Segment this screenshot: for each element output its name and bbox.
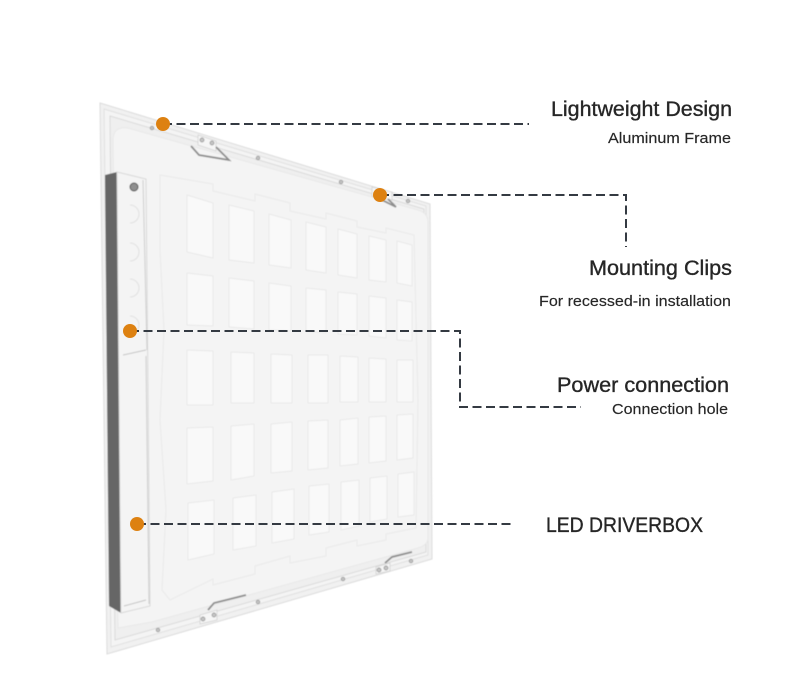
driver box — [105, 172, 150, 613]
callout: Mounting Clips — [373, 188, 732, 310]
callout: Lightweight Design — [156, 98, 732, 147]
embossed windows grid — [187, 195, 414, 560]
LED panel illustration — [100, 103, 432, 654]
callout: LED DRIVERBOX: LED DRIVERBOX — [546, 514, 703, 537]
embossed outline — [160, 175, 418, 600]
panel frame — [100, 103, 432, 654]
callout: Lightweight Design: Aluminum Frame — [608, 130, 731, 147]
frame screws — [150, 126, 413, 632]
bottom mounting clip right — [376, 552, 412, 574]
callout: Mounting Clips: Mounting Clips — [589, 257, 732, 280]
callout: Power connection: Connection hole — [612, 401, 728, 418]
panel back face — [113, 128, 428, 628]
callout: Power connection — [123, 324, 729, 418]
top mounting clip right — [372, 187, 396, 207]
callout: LED DRIVERBOX — [130, 514, 703, 537]
bottom mounting clip left — [200, 595, 246, 624]
callout: Mounting Clips: For recessed-in installation — [539, 293, 731, 310]
callout: Lightweight Design: Lightweight Design — [551, 98, 732, 121]
top mounting clip left — [191, 135, 229, 160]
callout: Power connection: Power connection — [557, 374, 729, 397]
